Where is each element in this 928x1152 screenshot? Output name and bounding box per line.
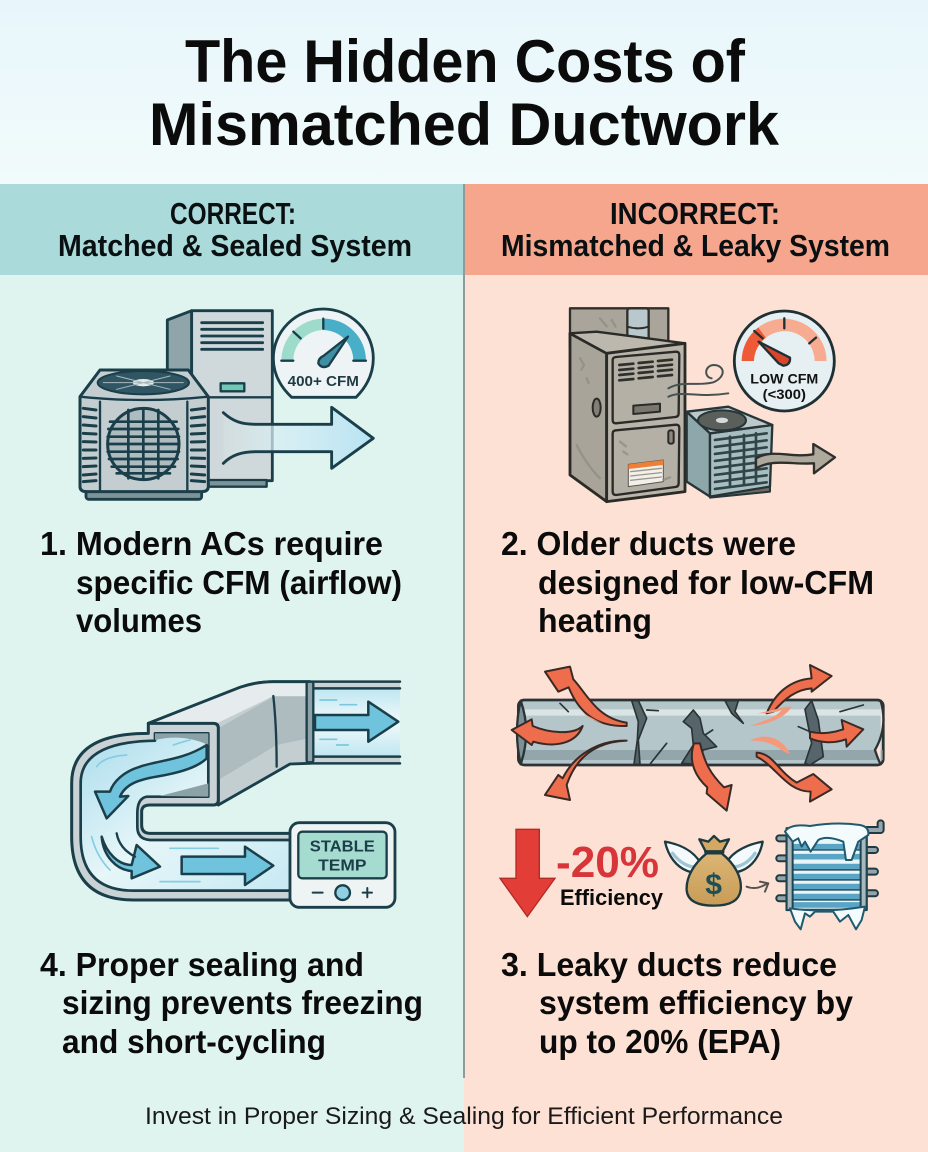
- panel header: correct: [0, 184, 464, 275]
- panel header: correct: CORRECT:: [170, 196, 296, 231]
- icon: frozen coil: [779, 823, 881, 929]
- weak airflow arrow: [756, 444, 835, 473]
- thermostat: STABLE: [310, 839, 375, 856]
- panel header: correct: Matched & Sealed System: [58, 228, 412, 263]
- text: item 3: [501, 946, 854, 1060]
- text: item 4: 4. Proper sealing and: [40, 946, 364, 983]
- thermostat: TEMP: [318, 858, 366, 875]
- text: item 2: designed for low-CFM: [538, 564, 874, 601]
- stat: -20% efficiency: -20%: [556, 838, 659, 887]
- text: item 1: specific CFM (airflow): [76, 564, 402, 601]
- thermostat: [290, 823, 395, 907]
- text: item 4: sizing prevents freezing: [62, 984, 423, 1021]
- text: item 1: [40, 525, 402, 639]
- stat: -20% efficiency: Efficiency: [560, 885, 664, 910]
- text: item 3: 3. Leaky ducts reduce: [501, 946, 837, 983]
- title: [149, 28, 780, 158]
- icon: modern AC unit with 400+ CFM gauge and strong airflow arrow: [80, 309, 373, 499]
- gauge: [273, 309, 373, 397]
- gauge: LOW CFM: [750, 371, 818, 386]
- text: item 2: 2. Older ducts were: [501, 525, 796, 562]
- icon: sealed duct with smooth airflow and stable temp thermostat: [72, 682, 400, 907]
- text: item 4: and short-cycling: [62, 1023, 326, 1060]
- gauge: (<300): [763, 387, 806, 402]
- curved airflow arrows: [92, 740, 273, 885]
- text: item 3: up to 20% (EPA): [539, 1023, 781, 1060]
- text: item 2: [501, 525, 874, 639]
- condenser body: [80, 370, 208, 499]
- small condenser: [687, 407, 772, 498]
- title: The Hidden Costs of: [185, 28, 746, 95]
- warning label: [628, 460, 663, 487]
- footer tagline: Invest in Proper Sizing & Sealing for Efficient Performance: [145, 1103, 783, 1130]
- airflow arrow: [223, 407, 373, 468]
- stat: -20% efficiency: [556, 838, 664, 910]
- panel header: incorrect: [465, 184, 928, 275]
- icon: money bag with wings: $: [705, 869, 722, 902]
- text: item 2: heating: [538, 602, 652, 639]
- escaping air arrows: [512, 665, 863, 811]
- insulated duct wall: [72, 723, 293, 900]
- text: item 3: system efficiency by: [539, 984, 854, 1021]
- duct cracks: [560, 701, 863, 765]
- icon: red down arrow: [500, 829, 555, 917]
- gauge: 400+ CFM: [288, 374, 359, 390]
- gauge: [734, 311, 834, 411]
- icon: old dusty furnace with weak airflow and low CFM gauge: [570, 308, 835, 502]
- icon: cracked leaky duct with escaping air arrows: [512, 665, 883, 811]
- text: item 1: 1. Modern ACs require: [40, 525, 383, 562]
- text: item 4: [40, 946, 423, 1060]
- weak air swirl: [668, 365, 728, 397]
- panel header: incorrect: Mismatched & Leaky System: [501, 228, 890, 263]
- text: item 1: volumes: [76, 602, 202, 639]
- panel header: incorrect: INCORRECT:: [610, 196, 780, 231]
- title: Mismatched Ductwork: [149, 91, 780, 158]
- right duct run: [307, 682, 400, 763]
- duct body: [148, 682, 310, 805]
- icon: money bag with wings: [665, 836, 768, 906]
